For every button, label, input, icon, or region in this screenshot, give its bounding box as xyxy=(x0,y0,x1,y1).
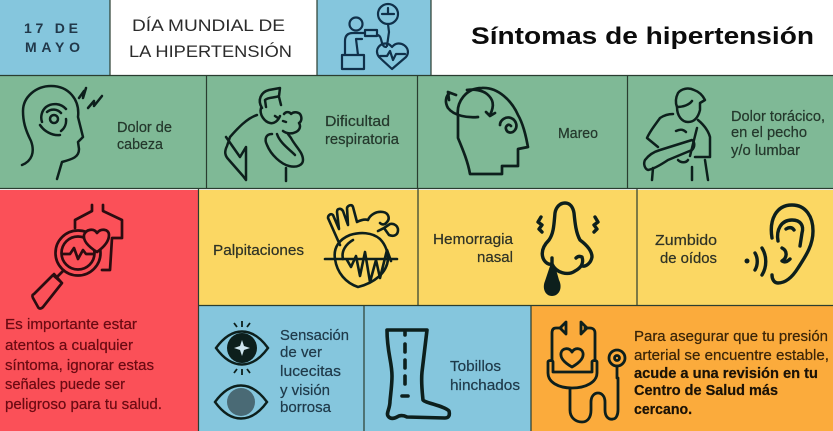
icon: stethoscope with heart xyxy=(548,322,625,422)
icon: breathing difficulty xyxy=(225,88,303,181)
icon: person checking heart pressure xyxy=(342,4,408,69)
panel: date xyxy=(0,0,110,76)
icon: heart with pulse xyxy=(325,205,398,287)
campaign title text xyxy=(129,16,292,61)
date text: MAYO xyxy=(25,39,80,55)
advice text: acude a una revisión en tu xyxy=(634,366,818,382)
panel: main title xyxy=(431,0,833,76)
label: palpitations: Palpitaciones xyxy=(213,243,304,259)
panel: tinnitus xyxy=(637,190,833,306)
label: blurred vision: Sensación xyxy=(280,328,349,344)
label: breathing difficulty xyxy=(325,114,400,148)
panel: palpitations xyxy=(199,190,418,306)
icon: dizziness xyxy=(446,88,528,174)
panel: chest pain xyxy=(628,76,833,189)
advice text: Centro de Salud más xyxy=(634,383,778,399)
label: chest pain xyxy=(731,109,825,159)
label: blurred vision: y visión xyxy=(280,383,330,399)
label: nosebleed: Hemorragia xyxy=(433,232,514,248)
icon: chest pain xyxy=(644,89,710,180)
campaign title text: DÍA MUNDIAL DE xyxy=(132,16,285,35)
label: swollen ankles: Tobillos xyxy=(450,359,501,375)
label: swollen ankles xyxy=(450,359,520,394)
advice text: arterial se encuentre estable, xyxy=(634,348,829,364)
label: tinnitus xyxy=(655,233,717,267)
icon detail: sound dot xyxy=(744,258,750,264)
icon: nosebleed xyxy=(538,203,598,273)
label: tinnitus: Zumbido xyxy=(655,233,717,249)
label: nosebleed xyxy=(433,232,514,266)
label: swollen ankles: hinchados xyxy=(450,378,520,394)
panel: headache xyxy=(0,76,207,189)
date text xyxy=(24,20,80,55)
label: breathing difficulty: Dificultad xyxy=(325,114,390,130)
label: chest pain: Dolor torácico, xyxy=(731,109,825,125)
panel: warning xyxy=(0,190,199,431)
label: chest pain: y/o lumbar xyxy=(731,143,800,159)
label: tinnitus: de oídos xyxy=(660,251,717,267)
panel: dizziness xyxy=(417,76,628,189)
date text: 17 DE xyxy=(24,20,78,36)
advice text: cercano. xyxy=(634,402,692,418)
panel: blurred vision xyxy=(199,306,364,431)
icon: blurred eye xyxy=(215,386,267,418)
label: blurred vision: de ver xyxy=(280,345,322,361)
icon: magnifier over body xyxy=(32,205,122,308)
label: nosebleed: nasal xyxy=(477,250,513,266)
label: breathing difficulty: respiratoria xyxy=(325,132,400,148)
label: blurred vision: lucecitas xyxy=(280,364,341,380)
label: headache: Dolor de xyxy=(117,120,172,136)
label: blurred vision: borrosa xyxy=(280,400,332,416)
main title: Síntomas de hipertensión xyxy=(471,23,814,50)
panel: advice xyxy=(531,306,833,431)
icon: headache xyxy=(22,86,102,179)
label: chest pain: en el pecho xyxy=(731,125,807,141)
label: blurred vision xyxy=(280,328,349,416)
label: dizziness: Mareo xyxy=(558,126,598,142)
icon: ear with sound xyxy=(755,205,813,283)
panel: nosebleed xyxy=(418,190,637,306)
warning text: atentos a cualquier xyxy=(5,338,133,354)
warning text: peligroso para tu salud. xyxy=(5,397,162,413)
warning text: Es importante estar xyxy=(5,317,137,333)
advice text xyxy=(634,329,829,418)
panel: header icon xyxy=(317,0,431,76)
panel: campaign title xyxy=(110,0,317,76)
label: headache xyxy=(117,120,172,153)
panel: breathing difficulty xyxy=(207,76,417,189)
label: headache: cabeza xyxy=(117,137,164,153)
icon: sparkling eye xyxy=(216,321,268,375)
warning text: señales puede ser xyxy=(5,377,125,393)
advice text: Para asegurar que tu presión xyxy=(634,329,828,345)
warning text: síntoma, ignorar estas xyxy=(5,358,154,374)
icon detail: blood drop xyxy=(544,266,561,296)
campaign title text: LA HIPERTENSIÓN xyxy=(129,42,292,61)
panel: swollen ankles xyxy=(364,306,531,431)
warning text xyxy=(5,317,162,413)
icon: swollen leg xyxy=(387,330,449,418)
